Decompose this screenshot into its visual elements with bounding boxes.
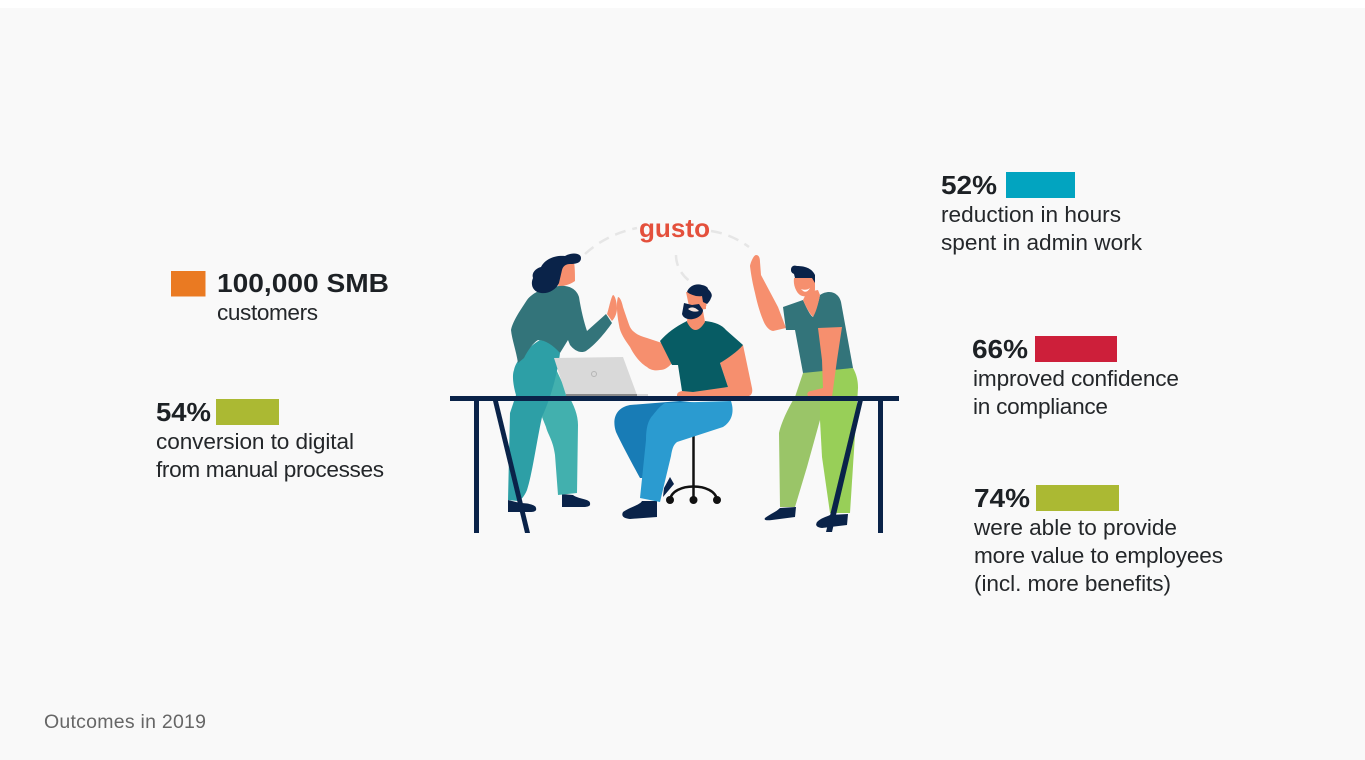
stat: 100,000 SMB customers: customers: [217, 300, 318, 325]
desk: [450, 396, 899, 533]
person: man seated: [614, 284, 752, 519]
icon: laptop: [554, 357, 648, 396]
logo: gusto: gusto: [639, 213, 710, 243]
stat: 74% more value to employees: more value to employees: [974, 543, 1223, 568]
person: woman standing: [508, 254, 617, 512]
illustration: team high-five at desk: [450, 213, 899, 533]
stat: 52% reduction in admin hours: [941, 170, 1143, 255]
stat: 74% more value to employees: (incl. more benefits): [974, 571, 1171, 596]
stat: 100,000 SMB customers: 100,000 SMB: [217, 268, 389, 298]
stat: 74% more value to employees: [973, 483, 1223, 596]
person: man standing: [750, 255, 858, 528]
stat: 54% conversion to digital: [156, 397, 384, 482]
stat: 74% more value to employees: were able to provide: [973, 515, 1177, 540]
stool: [666, 436, 721, 504]
stat: 52% reduction in admin hours: reduction in hours: [941, 202, 1121, 227]
stat: 66% improved confidence: improved confidence: [973, 366, 1179, 391]
stat: 54% conversion to digital: from manual processes: [156, 457, 384, 482]
stat: 66% improved confidence: [972, 334, 1179, 419]
stat: 52% reduction in admin hours: spent in admin work: [941, 230, 1143, 255]
stat: 100,000 SMB customers: [171, 268, 389, 325]
stat: 54% conversion to digital: conversion to digital: [156, 429, 354, 454]
stat: 66% improved confidence: in compliance: [973, 394, 1108, 419]
dashed arcs around logo: [585, 228, 749, 282]
stat: 66% improved confidence: 66%: [972, 334, 1028, 364]
stat: 52% reduction in admin hours: 52%: [941, 170, 997, 200]
footnote: Outcomes in 2019: [44, 711, 206, 733]
stat: 74% more value to employees: 74%: [974, 483, 1030, 513]
stat: 54% conversion to digital: 54%: [156, 397, 211, 427]
